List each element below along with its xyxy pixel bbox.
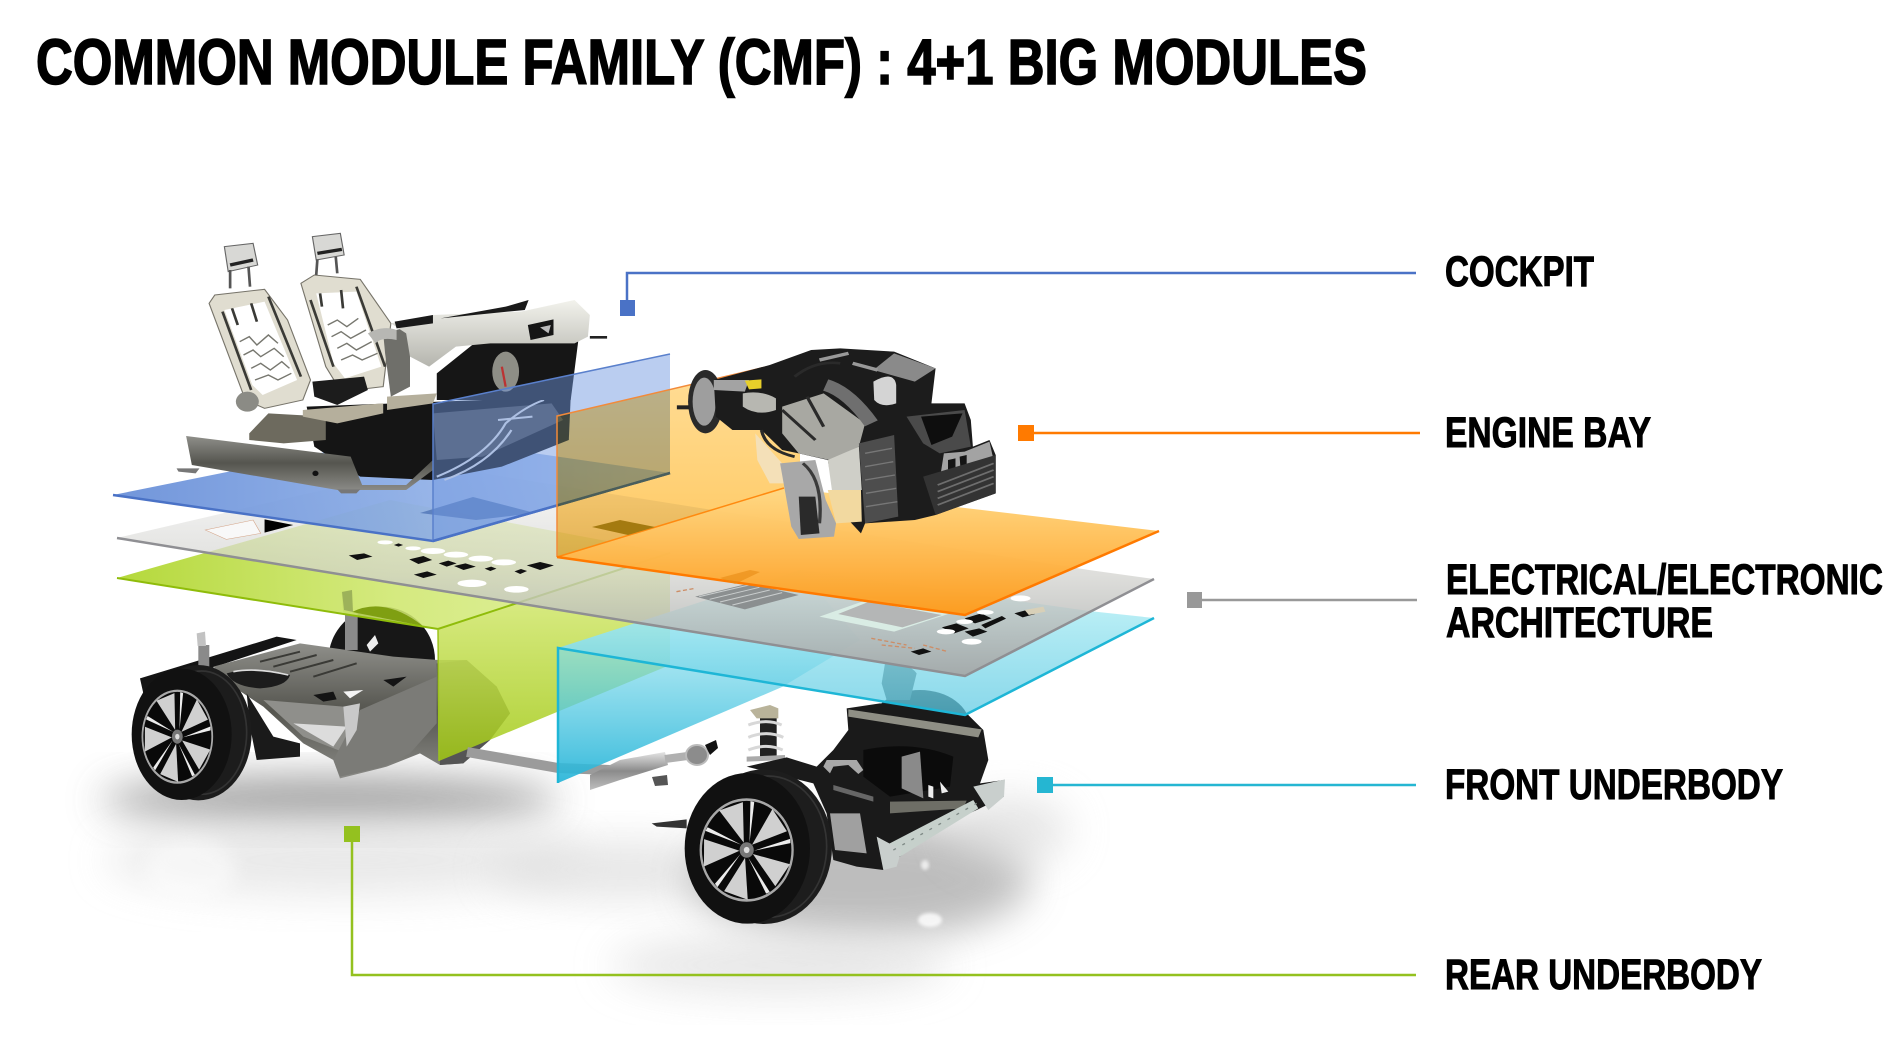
- cyan floor: [558, 570, 1154, 715]
- callout: electrical electronic architecture: [1187, 556, 1883, 647]
- callout: front underbody: FRONT UNDERBODY: [1445, 761, 1783, 809]
- engine pale block lower: [828, 490, 862, 523]
- panel: rear underbody green plane: [117, 500, 670, 761]
- cyan wall: [558, 570, 860, 783]
- green wall: [438, 553, 670, 761]
- right seat: [301, 233, 391, 405]
- ground shadows and reflections: [100, 776, 1070, 995]
- front bumper bracket: [877, 779, 1005, 870]
- oil pan / front cover: [780, 460, 836, 539]
- front board components: [676, 583, 1045, 655]
- anti-roll bar: [652, 819, 687, 828]
- rear underbody assembly: body behind green plane: [132, 590, 510, 800]
- panel: front underbody cyan plane: [558, 570, 1154, 783]
- front underbody assembly: [652, 663, 1005, 924]
- near shock absorber: [197, 632, 209, 667]
- rear board components: [205, 519, 554, 593]
- orange floor: [557, 488, 1159, 615]
- callout: cockpit: COCKPIT: [1445, 248, 1594, 296]
- wheel arch seen through floor: [352, 606, 423, 626]
- near rear wheel: [132, 665, 252, 800]
- front spring strut: [747, 705, 785, 762]
- callout: cockpit: [620, 248, 1594, 316]
- front wheel: [685, 769, 832, 924]
- brake booster: [677, 370, 723, 433]
- left seat: [209, 243, 310, 412]
- panel: cockpit blue floor: [113, 435, 670, 541]
- floor pan: [140, 637, 510, 778]
- radiator and cooling pack: [859, 410, 996, 523]
- subframe: [747, 703, 1004, 870]
- callout: rear underbody: REAR UNDERBODY: [1445, 951, 1762, 999]
- title: COMMON MODULE FAMILY (CMF) : 4+1 BIG MODULES: [36, 26, 1367, 98]
- cockpit module: seats and dashboard: [177, 233, 607, 493]
- panel: engine bay orange plane: [557, 360, 1159, 615]
- far shock absorber: [342, 590, 358, 650]
- far rear wheel: [328, 607, 435, 713]
- engine pale block seen through: [755, 433, 788, 483]
- far front wheel top: [870, 663, 970, 763]
- panel: cockpit blue wall: [433, 354, 670, 541]
- engine dark mass: [714, 348, 996, 533]
- dashboard beam: [368, 300, 607, 400]
- engine module: [677, 348, 996, 539]
- callout: front underbody: [1037, 761, 1783, 809]
- callout: engine bay: ENGINE BAY: [1445, 409, 1651, 457]
- green floor: [117, 500, 670, 629]
- callout: electrical electronic architecture: ARCHITECTURE: [1446, 599, 1713, 647]
- callout: rear underbody: [344, 826, 1762, 999]
- seat rail: [177, 393, 437, 493]
- exhaust and catalytic converter: [467, 740, 718, 790]
- callout: engine bay: [1018, 409, 1651, 457]
- orange wall: [557, 360, 800, 557]
- dark lower structure: [307, 397, 571, 480]
- panel: electrical electronic architecture plane: [117, 465, 1154, 676]
